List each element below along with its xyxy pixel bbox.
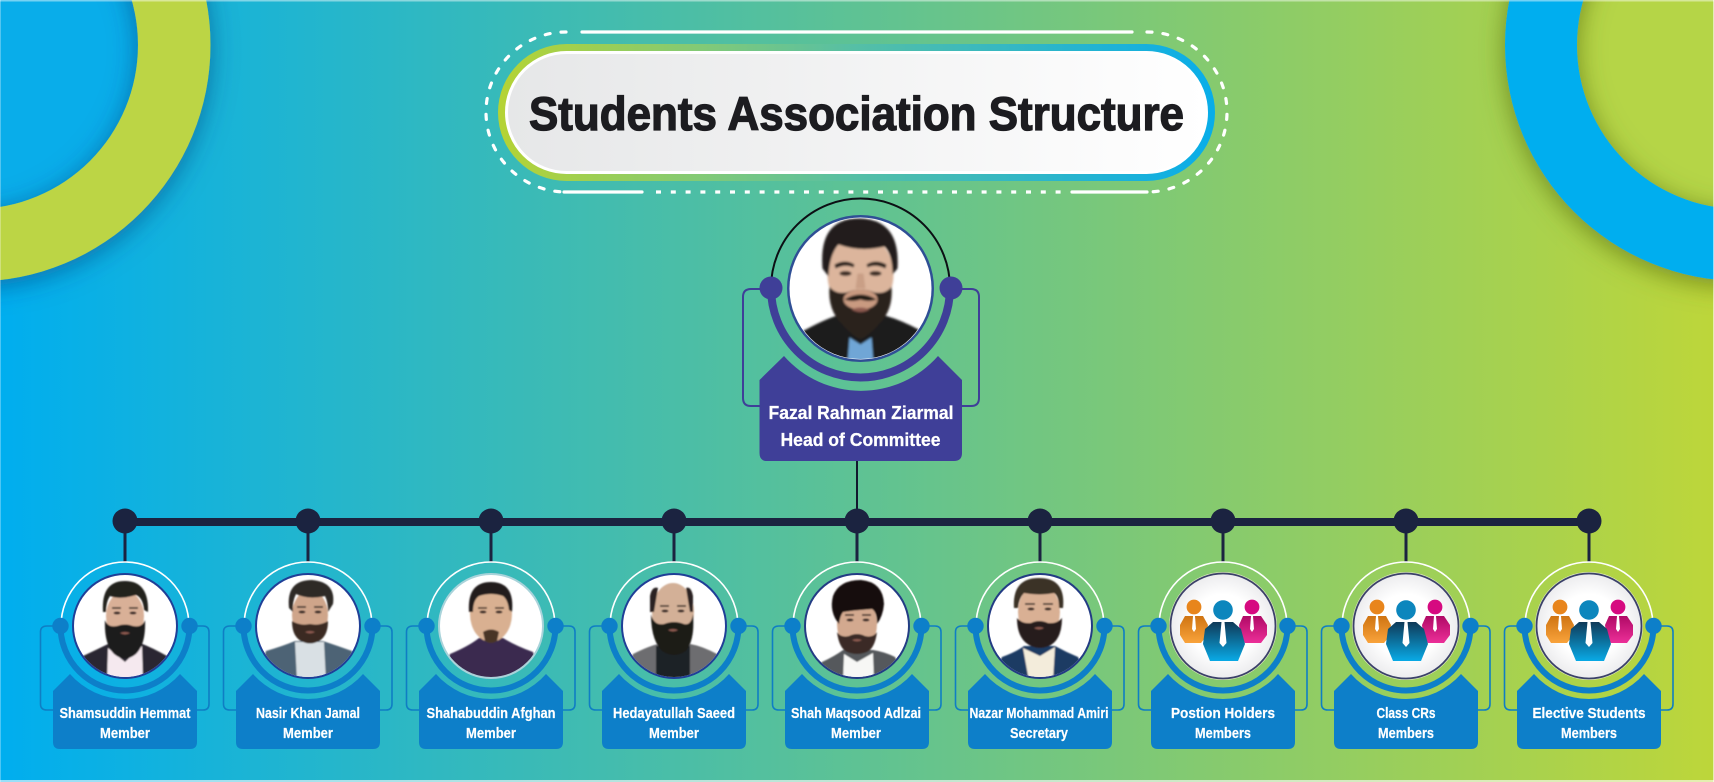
- portrait: [438, 573, 544, 686]
- role: Member: [283, 726, 333, 742]
- portrait: [987, 573, 1093, 686]
- member node: Shahabuddin Afghan: [406, 562, 575, 749]
- title banner: [486, 32, 1227, 192]
- head name: Fazal Rahman Ziarmal: [768, 403, 954, 423]
- connector from head to bar: [856, 461, 858, 522]
- member node: Shah Maqsood Adlzai: [772, 562, 941, 749]
- group node: Class CRs: [1322, 562, 1490, 749]
- name: Nazar Mohammad Amiri: [970, 706, 1108, 722]
- name: Elective Students: [1532, 706, 1646, 722]
- role: Member: [649, 726, 699, 742]
- dashed outline around banner: [486, 32, 1227, 192]
- role: Members: [1561, 726, 1617, 742]
- corner decoration: top left: [0, 0, 210, 282]
- head connector brackets: [743, 289, 979, 406]
- horizontal connector bar: [112, 508, 1602, 562]
- title: Students Association Structure: [529, 87, 1184, 140]
- banner white pill: [506, 52, 1206, 172]
- name: Nasir Khan Jamal: [256, 706, 360, 722]
- head photo: portrait: [786, 215, 936, 368]
- group node: Elective Students: [1504, 562, 1673, 749]
- icon: three people: [1169, 572, 1277, 680]
- role: Members: [1195, 726, 1251, 742]
- portrait: [804, 573, 910, 686]
- role: Member: [466, 726, 516, 742]
- name: Hedayatullah Saeed: [613, 706, 735, 722]
- banner gradient band: [498, 44, 1215, 181]
- icon: three people: [1352, 572, 1460, 680]
- role: Members: [1378, 726, 1434, 742]
- portrait: [72, 573, 178, 686]
- role: Member: [100, 726, 150, 742]
- portrait: [255, 573, 361, 686]
- head outer arc: [771, 198, 950, 288]
- name: Postion Holders: [1171, 706, 1275, 722]
- group node: Postion Holders: [1138, 562, 1307, 749]
- head name plate: [760, 356, 962, 461]
- role: Member: [831, 726, 881, 742]
- head role: Head of Committee: [780, 430, 940, 450]
- portrait: [621, 573, 727, 686]
- name: Class CRs: [1376, 706, 1436, 722]
- head of committee node: [743, 198, 979, 461]
- corner decoration: top right: [1505, 0, 1714, 281]
- name: Shahabuddin Afghan: [426, 706, 556, 722]
- head lower arc: [771, 288, 950, 377]
- member node: Nasir Khan Jamal: [224, 562, 392, 749]
- member node: Nazar Mohammad Amiri: [956, 562, 1124, 749]
- icon: three people: [1535, 572, 1643, 680]
- member node: Hedayatullah Saeed: [590, 562, 758, 749]
- member node: Shamsuddin Hemmat: [40, 562, 209, 749]
- head connector dots: [760, 276, 962, 300]
- role: Secretary: [1010, 726, 1068, 742]
- name: Shamsuddin Hemmat: [60, 706, 191, 722]
- name: Shah Maqsood Adlzai: [791, 706, 921, 722]
